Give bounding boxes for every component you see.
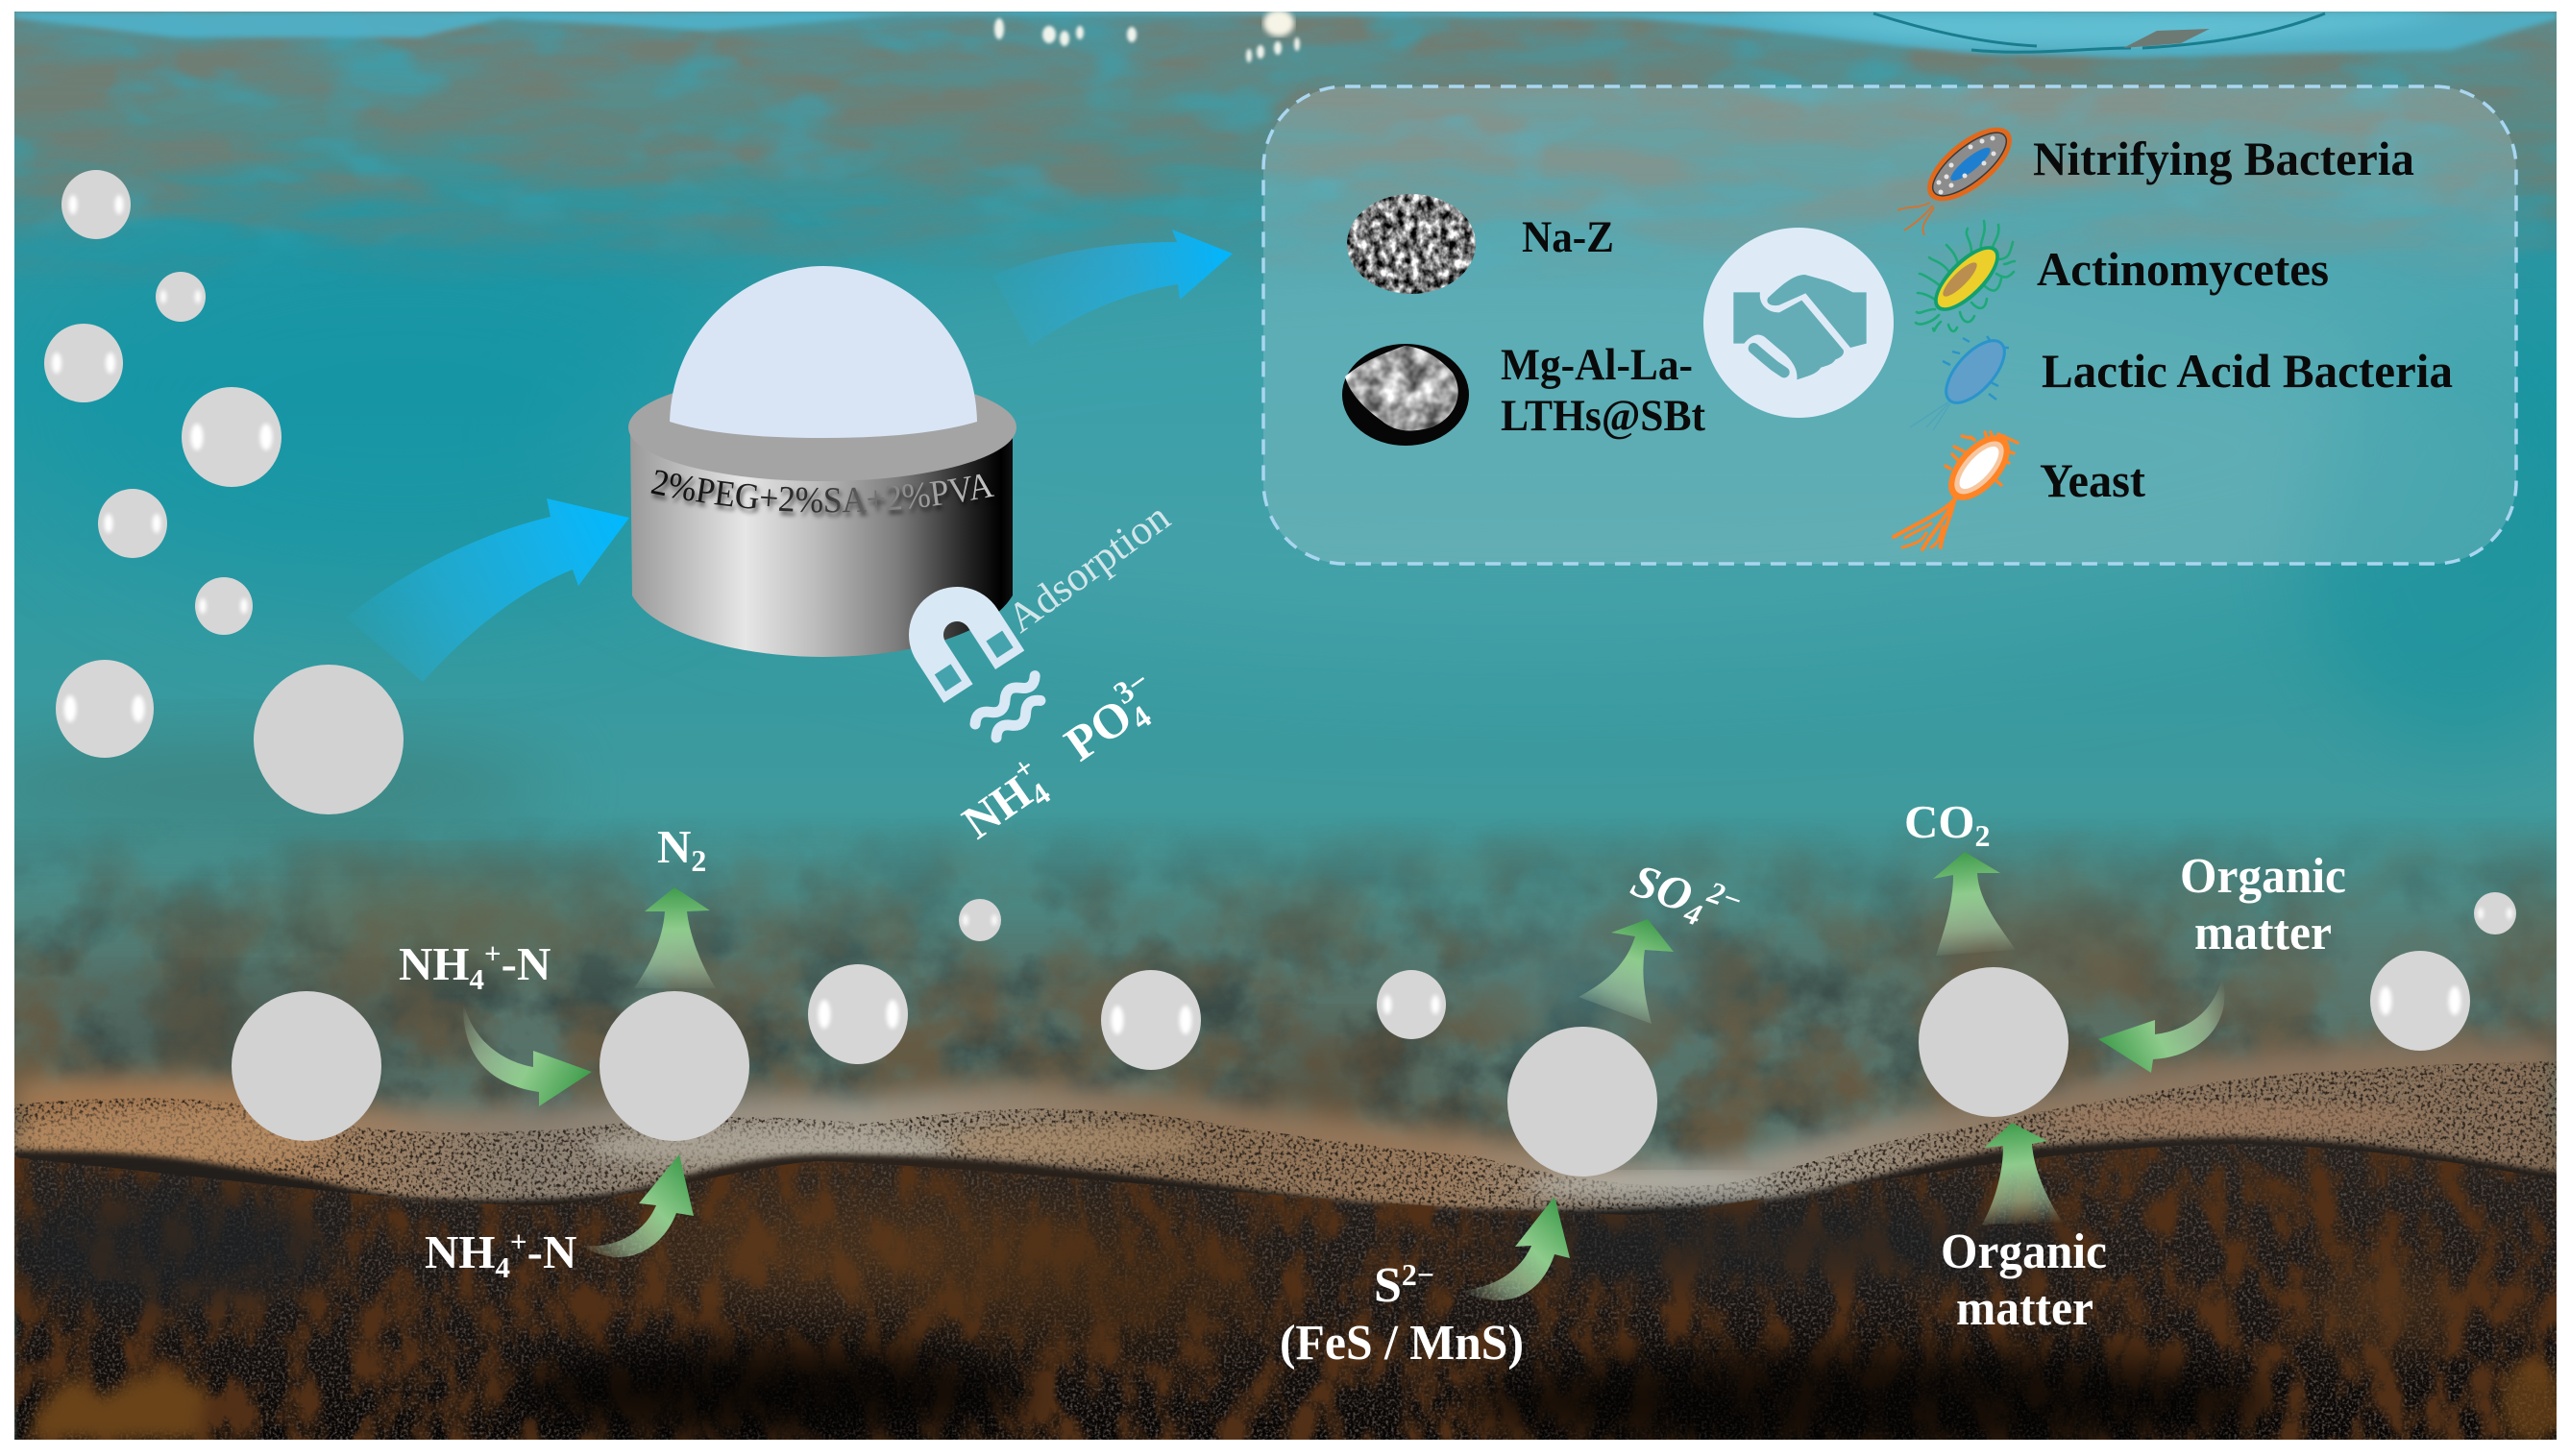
label: Yeast: Yeast xyxy=(2040,453,2145,507)
label: Mg-Al-La-LTHs@SBt: LTHs@SBt xyxy=(1501,391,1705,441)
label: Mg-Al-La-LTHs@SBt xyxy=(1501,340,1705,441)
label: NH4+-N upper: 4 xyxy=(469,962,484,996)
icon: handshake xyxy=(1703,228,1894,418)
bead: grey sphere entering carrier xyxy=(254,665,404,814)
arrow: NH4 from above xyxy=(463,1001,592,1106)
murky sediment haze xyxy=(14,816,2557,1201)
label: organic matter right xyxy=(2180,849,2346,960)
label: SO4 2-: 4 xyxy=(1679,894,1706,933)
cylinder side xyxy=(630,430,1013,657)
label: Mg-Al-La-LTHs@SBt: Mg-Al-La- xyxy=(1501,340,1693,390)
label: SO4 2-: 2− xyxy=(1702,874,1747,918)
label: SO4 2-: SO xyxy=(1625,853,1700,923)
carrier: cylinder with dome: 2%PEG+2%SA+2%PVA xyxy=(651,471,995,519)
bead: ammonium site right xyxy=(600,991,749,1141)
bead: ammonium site left xyxy=(232,991,381,1141)
label: organic matter bottom: matter xyxy=(1956,1281,2093,1336)
arrow: carrier to composition panel xyxy=(992,230,1233,346)
label: organic matter right: matter xyxy=(2194,906,2332,960)
label: Adsorption: Adsorption xyxy=(999,495,1178,642)
label: CO2: 2 xyxy=(1975,818,1991,853)
sandy sediment band xyxy=(10,1037,2557,1268)
label: NH4+-N lower: -N xyxy=(527,1225,576,1278)
label: organic matter right: Organic xyxy=(2180,849,2346,904)
cylinder top xyxy=(628,374,1016,481)
label: PO4 3-: 4 xyxy=(1125,699,1158,737)
label: NH4+-N lower: NH xyxy=(425,1225,496,1278)
arrow: organic matter from below xyxy=(1982,1123,2063,1225)
label: CO2: CO xyxy=(1904,795,1975,848)
label: N2: 2 xyxy=(691,843,706,878)
label: NH4+-N lower: + xyxy=(510,1225,527,1258)
cylinder label xyxy=(649,493,996,512)
label: organic matter bottom xyxy=(1941,1225,2107,1336)
label: NH4+-N upper: -N xyxy=(502,937,551,990)
arrow: organic matter from the right xyxy=(2098,978,2224,1073)
icon: yeast xyxy=(1894,425,2021,549)
bead: sulfide site xyxy=(1507,1027,1657,1177)
icon: lactic acid bacterium xyxy=(1910,331,2015,430)
icon: adsorption waves xyxy=(972,671,1043,741)
label: Lactic Acid Bacteria: Lactic Acid Bacteria xyxy=(2042,344,2453,398)
panel background xyxy=(1263,86,2516,564)
arrow: sulfide uptake xyxy=(1459,1197,1570,1300)
label: Nitrifying Bacteria: Nitrifying Bacteria xyxy=(2033,132,2414,185)
arrow: N2 release xyxy=(634,887,716,988)
arrow: bead into the carrier xyxy=(346,498,629,682)
label: PO4 3-: PO xyxy=(1056,689,1142,772)
label: NH4+-N upper: NH xyxy=(399,937,469,990)
label: NH4+: NH xyxy=(953,765,1041,849)
label: NH4+: + xyxy=(1006,749,1040,788)
label: N2: N xyxy=(657,820,691,873)
label: S2- (FeS / MnS): S xyxy=(1374,1258,1402,1313)
label: PO4 3-: 3− xyxy=(1108,664,1156,712)
label: Actinomycetes: Actinomycetes xyxy=(2037,242,2329,296)
dome xyxy=(670,266,977,438)
arrow: NH4 from below xyxy=(582,1154,694,1257)
label: NH4+-N upper: + xyxy=(484,936,502,970)
carrier: cylinder with dome xyxy=(628,266,1016,657)
label: S2- (FeS / MnS): 2− xyxy=(1402,1257,1434,1292)
image: Na-Z micrograph xyxy=(1347,194,1476,294)
bubbles: left column xyxy=(44,170,281,758)
icon: magnet xyxy=(891,569,1024,703)
panel: bead composition xyxy=(1263,86,2516,564)
bead: organic matter site xyxy=(1919,967,2068,1117)
label: NH4+-N lower: 4 xyxy=(496,1250,510,1284)
label: Na-Z: Na-Z xyxy=(1522,212,1614,262)
dark sediment foreground xyxy=(10,1137,2570,1456)
image: Mg-Al-La micrograph xyxy=(1342,344,1469,446)
bubbles: sediment row xyxy=(808,892,2516,1070)
label: S2- (FeS / MnS) xyxy=(1280,1257,1524,1371)
icon: nitrifying bacterium xyxy=(1897,114,2023,235)
arrow: CO2 release xyxy=(1933,852,2016,956)
icon: actinomycete xyxy=(1916,221,2015,331)
label: organic matter bottom: Organic xyxy=(1941,1225,2107,1279)
label: S2- (FeS / MnS): (FeS / MnS) xyxy=(1280,1316,1524,1371)
arrow: SO4 release xyxy=(1579,919,1674,1024)
label: NH4+: 4 xyxy=(1024,775,1056,813)
